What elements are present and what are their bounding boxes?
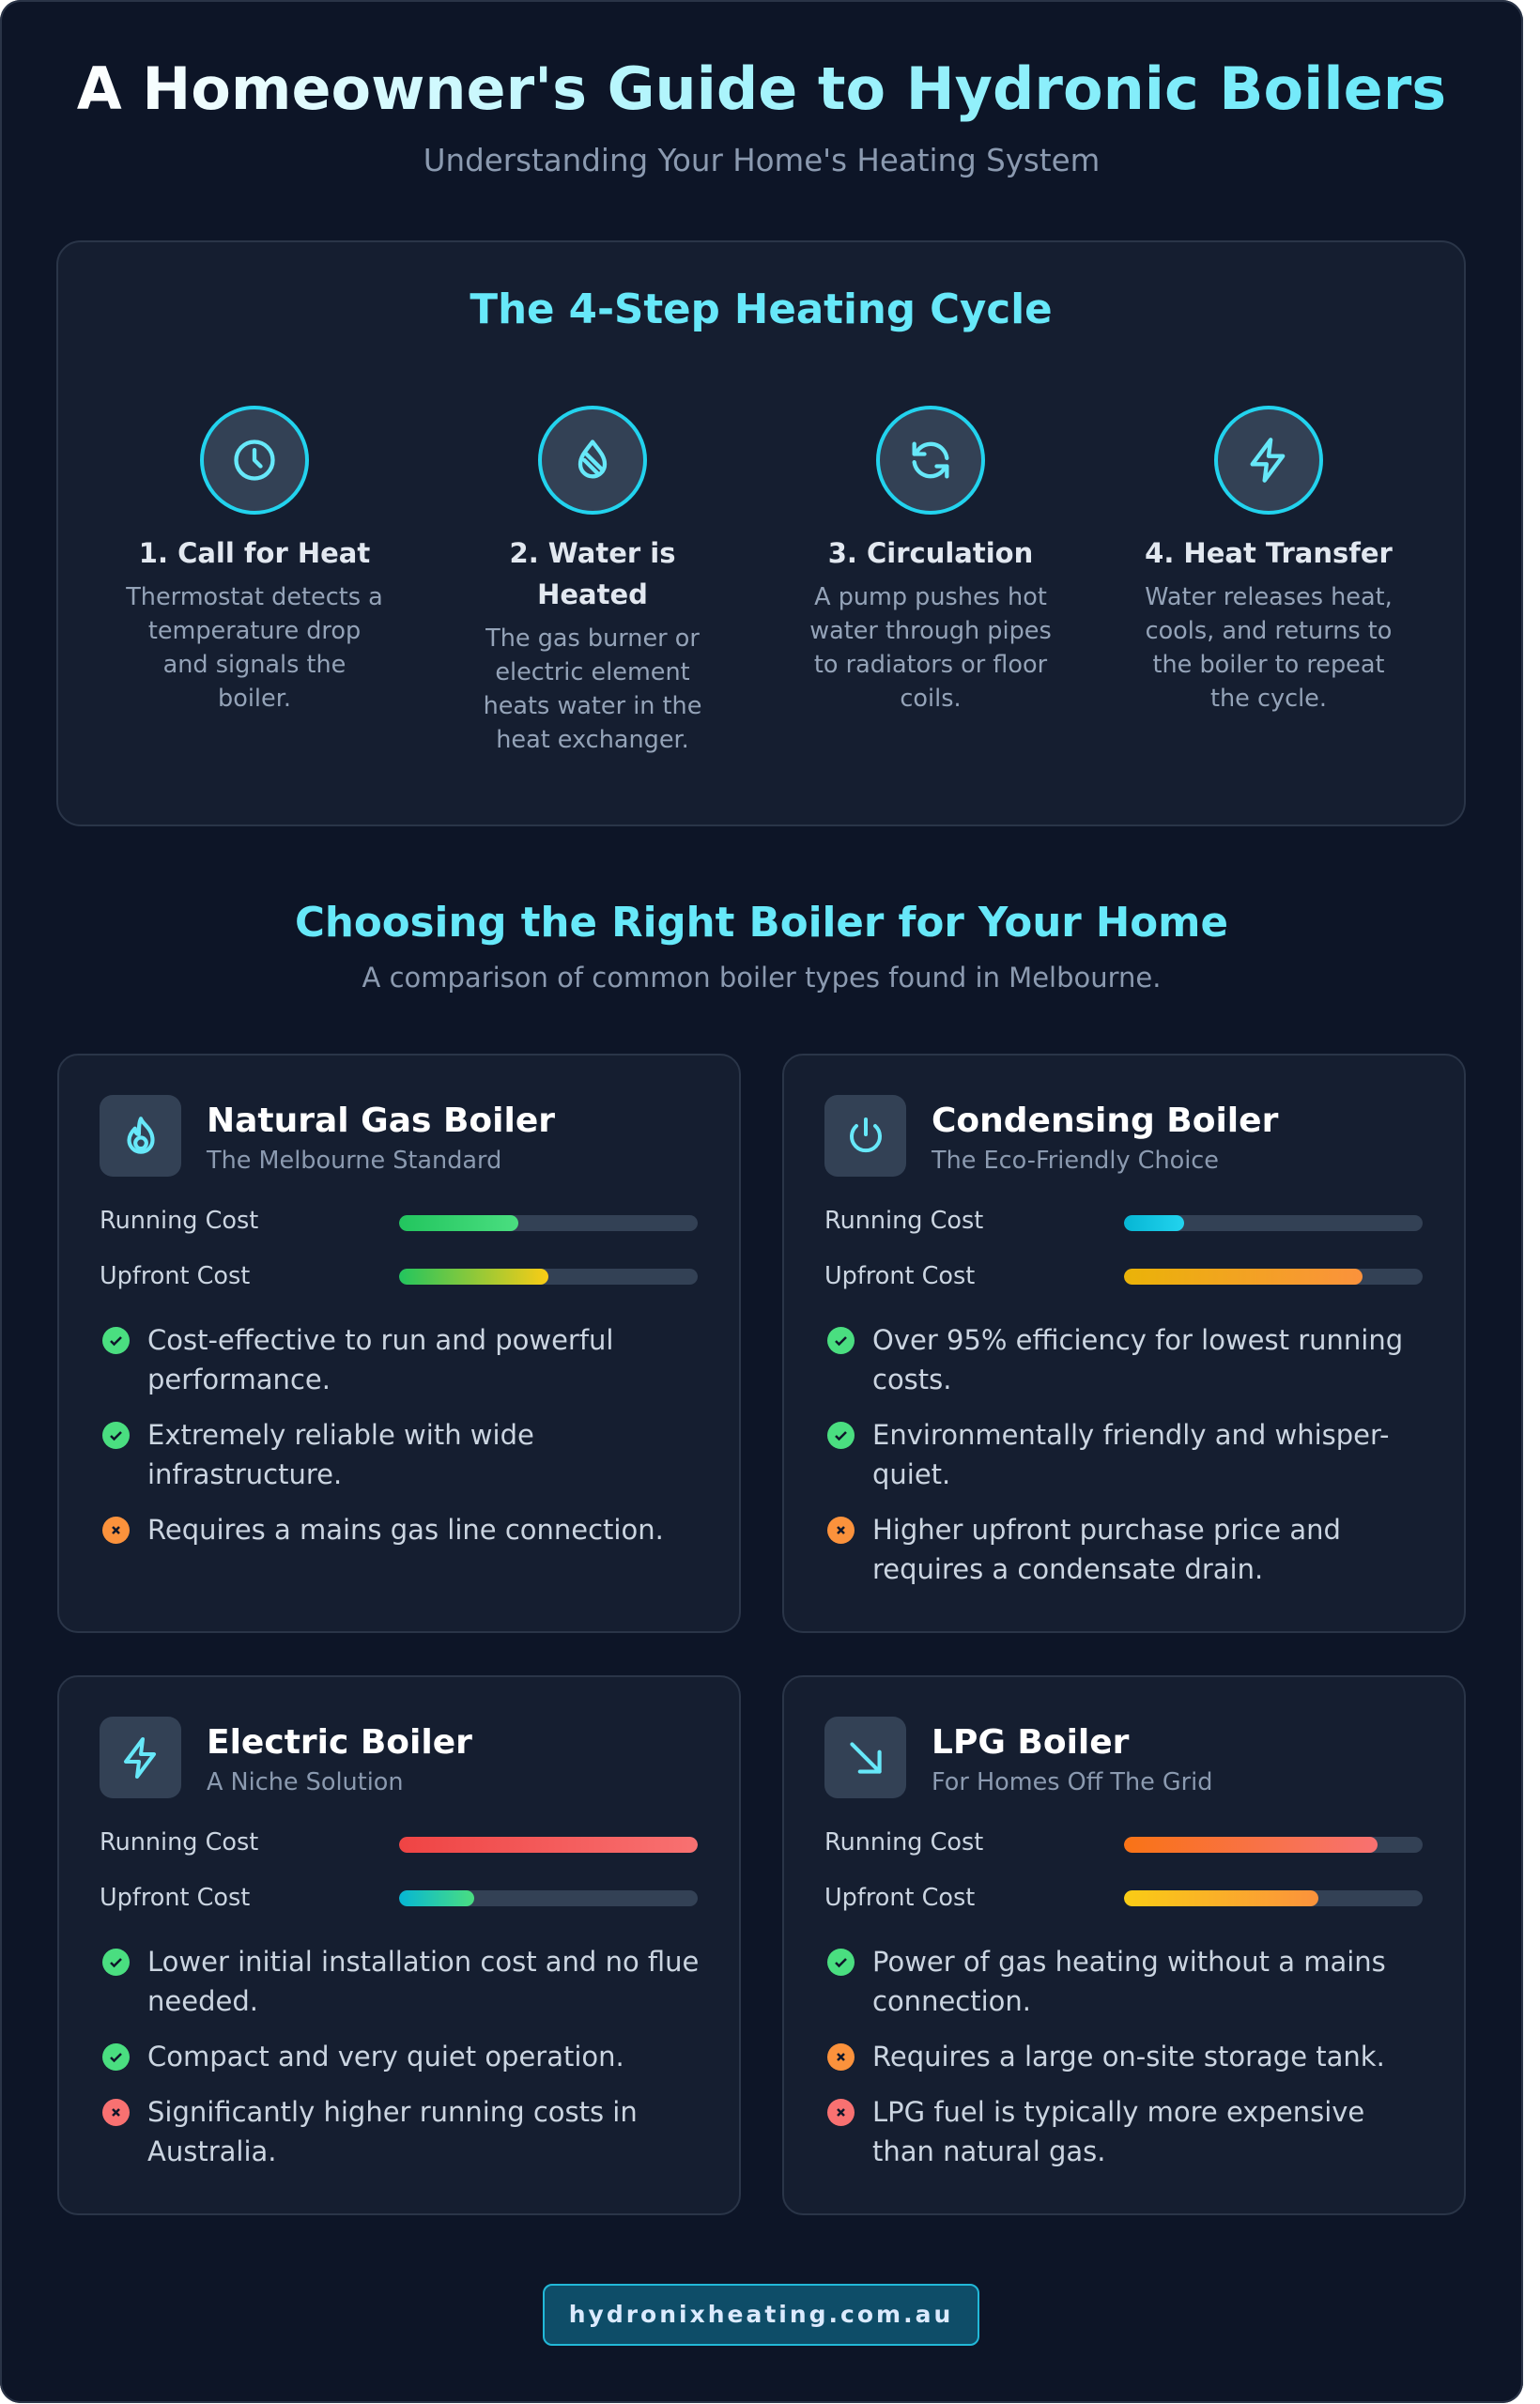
step 4 text: the boiler to repeat	[1152, 651, 1384, 679]
card subtitle: The Melbourne Standard	[207, 1147, 501, 1175]
pros and cons list: quiet.	[872, 1458, 950, 1490]
panel heading: The 4-Step Heating Cycle	[470, 286, 1053, 333]
pros and cons list	[827, 1324, 1403, 1585]
step 4 text: cools, and returns to	[1146, 617, 1392, 645]
step 3 text: 3. Circulation	[828, 537, 1033, 569]
card: natural gas boiler	[57, 1054, 741, 1633]
pros and cons list	[102, 1946, 699, 2167]
pros and cons list: Over 95% efficiency for lowest running	[872, 1324, 1403, 1356]
card: electric boiler	[57, 1675, 741, 2215]
step 2 text: electric element	[495, 658, 690, 686]
pros and cons list: Cost-effective to run and powerful	[147, 1324, 613, 1356]
step 2 text: Heated	[537, 578, 648, 610]
pros and cons list: requires a condensate drain.	[872, 1553, 1263, 1585]
cost bars	[824, 1828, 1423, 1912]
icon: refresh	[876, 406, 985, 515]
step 2 text: 2. Water is	[510, 537, 675, 569]
footer: website badge: hydronixheating.com.au	[569, 2301, 953, 2328]
step 2 text: heats water in the	[484, 692, 701, 720]
step 3 text: water through pipes	[809, 617, 1052, 645]
card subtitle: The Eco-Friendly Choice	[932, 1147, 1219, 1175]
pros and cons list: infrastructure.	[147, 1458, 342, 1490]
pros and cons list: costs.	[872, 1364, 952, 1395]
step 2 text	[484, 537, 701, 754]
cost bars: Upfront Cost	[824, 1884, 975, 1912]
footer: website badge	[543, 2284, 979, 2346]
step 3	[809, 406, 1052, 713]
step 1 text: Thermostat detects a	[126, 583, 383, 611]
icon: clock	[200, 406, 309, 515]
step 3 text: A pump pushes hot	[814, 583, 1047, 611]
step 1	[126, 406, 383, 713]
card: LPG boiler	[782, 1675, 1466, 2215]
icon: lightning	[100, 1717, 181, 1798]
step 4 text: Water releases heat,	[1145, 583, 1393, 611]
step 4 text	[1145, 537, 1393, 713]
card title: LPG Boiler	[932, 1723, 1129, 1762]
step 4 text: 4. Heat Transfer	[1145, 537, 1393, 569]
pros and cons list: Significantly higher running costs in	[147, 2096, 638, 2128]
step 4	[1145, 406, 1393, 713]
section heading: Choosing the Right Boiler for Your Home	[295, 900, 1228, 947]
subtitle: Understanding Your Home's Heating System	[424, 143, 1100, 178]
running cost bar: Running Cost	[100, 1207, 258, 1235]
panel: 4-step heating cycle	[56, 240, 1466, 826]
step 2	[484, 406, 701, 754]
running cost bar: Upfront Cost	[100, 1262, 250, 1290]
step 4 text: the cycle.	[1210, 685, 1327, 713]
step 3 text: to radiators or floor	[814, 651, 1047, 679]
card title: Natural Gas Boiler	[207, 1102, 555, 1140]
pros and cons list: needed.	[147, 1985, 258, 2017]
step 3 text: coils.	[900, 685, 962, 713]
card subtitle: For Homes Off The Grid	[932, 1768, 1212, 1796]
icon: flame drop	[538, 406, 647, 515]
icon: arrow down-right	[824, 1717, 906, 1798]
step 2 text: The gas burner or	[485, 624, 700, 653]
step 3 text	[809, 537, 1052, 713]
pros and cons list: Extremely reliable with wide	[147, 1419, 534, 1451]
pros and cons list: than natural gas.	[872, 2135, 1106, 2167]
pros and cons list	[102, 1324, 664, 1546]
cost bars: Upfront Cost	[100, 1884, 250, 1912]
pros and cons list: performance.	[147, 1364, 331, 1395]
icon: flame	[100, 1095, 181, 1177]
pros and cons list: Requires a mains gas line connection.	[147, 1514, 664, 1546]
section subtitle: A comparison of common boiler types found in Melbourne.	[362, 962, 1161, 994]
cost bars: Upfront Cost	[824, 1262, 975, 1290]
pros and cons list: Higher upfront purchase price and	[872, 1514, 1341, 1546]
step 1 text: 1. Call for Heat	[139, 537, 370, 569]
pros and cons list: Lower initial installation cost and no flue	[147, 1946, 699, 1978]
pros and cons list: LPG fuel is typically more expensive	[872, 2096, 1364, 2128]
pros and cons list: Requires a large on-site storage tank.	[872, 2041, 1385, 2073]
card: condensing boiler	[782, 1054, 1466, 1633]
card subtitle: A Niche Solution	[207, 1768, 404, 1796]
step 1 text: boiler.	[218, 685, 291, 713]
pros and cons list: Compact and very quiet operation.	[147, 2041, 624, 2073]
pros and cons list: connection.	[872, 1985, 1031, 2017]
icon: power	[824, 1095, 906, 1177]
cost bars: Running Cost	[100, 1828, 258, 1857]
icon: lightning	[1214, 406, 1323, 515]
card title: Condensing Boiler	[932, 1102, 1278, 1140]
cost bars	[824, 1207, 1423, 1290]
title: A Homeowner's Guide to Hydronic Boilers	[77, 54, 1446, 123]
pros and cons list	[827, 1946, 1386, 2167]
step 1 text: temperature drop	[148, 617, 361, 645]
step 1 text	[126, 537, 383, 713]
step 2 text: heat exchanger.	[496, 726, 689, 754]
cost bars: Running Cost	[824, 1828, 983, 1857]
pros and cons list: Environmentally friendly and whisper-	[872, 1419, 1390, 1451]
step 1 text: and signals the	[163, 651, 346, 679]
pros and cons list: Australia.	[147, 2135, 276, 2167]
card title: Electric Boiler	[207, 1723, 472, 1762]
running cost bar	[100, 1207, 698, 1290]
pros and cons list: Power of gas heating without a mains	[872, 1946, 1386, 1978]
cost bars	[100, 1828, 698, 1912]
cost bars: Running Cost	[824, 1207, 983, 1235]
